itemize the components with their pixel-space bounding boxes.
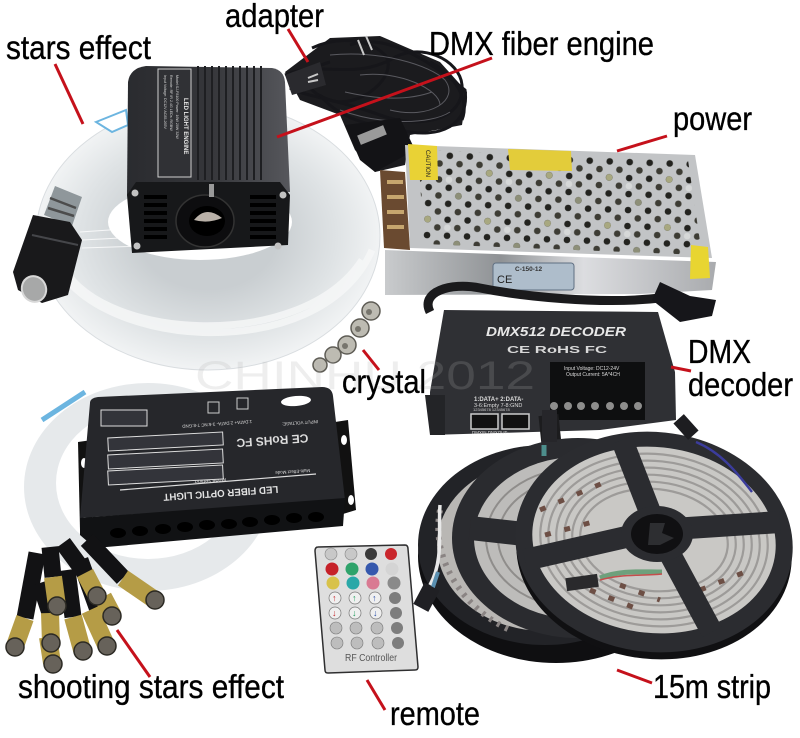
RF remote control	[315, 545, 418, 673]
remote arrow and DIY buttons: ↑	[352, 593, 356, 603]
label: DMX: DMX	[688, 333, 751, 370]
tail metal tips	[6, 587, 164, 673]
reel spokes and hub	[525, 440, 780, 632]
adapter cable bundle	[285, 36, 467, 172]
label: DMX fiber engine: DMX fiber engine	[429, 25, 654, 62]
model label	[493, 263, 574, 290]
label: crystal: crystal	[342, 363, 426, 400]
left strip connector	[413, 505, 440, 612]
decoder terminal	[550, 362, 645, 420]
control box panel text: INPUT VOLTAGE:	[282, 419, 318, 427]
lower metal plate	[385, 250, 716, 295]
label: shooting stars effect: shooting stars effect	[18, 668, 284, 705]
middle reel	[452, 438, 704, 638]
control box panel text: Mode setting:	[192, 476, 226, 484]
ring body	[36, 102, 380, 370]
ring label tag	[96, 110, 128, 132]
tail brass ends	[15, 573, 155, 663]
control box panel text: CE RoHS FC	[236, 431, 309, 450]
control box panel text: Multi-Effect Mode	[275, 468, 310, 475]
decoder cable and plug	[428, 286, 660, 312]
engine label plate	[158, 69, 191, 177]
remote color buttons	[325, 548, 400, 590]
DMX decoder: CE RoHS FC	[507, 344, 608, 356]
label: remote: remote	[390, 695, 480, 732]
decoder RJ45 ports: 3-6:Empty 7-8:GND	[474, 403, 522, 409]
decoder terminal: Input Voltage: DC12-24V	[564, 366, 620, 372]
fiber optic control box	[78, 387, 356, 548]
tail black sleeves	[25, 540, 123, 618]
power supply	[380, 144, 716, 295]
fiber crystal pieces	[313, 302, 380, 372]
engine top housing	[127, 66, 290, 195]
caution stickers	[408, 144, 438, 180]
engine label plate: Model:SJ-F8100 Power: 16W 20W 32W	[175, 75, 179, 139]
label: stars effect: stars effect	[6, 29, 151, 66]
control box top face	[80, 387, 345, 518]
terminal block	[380, 170, 410, 250]
stars effect fiber ring	[36, 102, 380, 370]
remote arrow and DIY buttons: ↓	[332, 608, 336, 618]
engine lens	[176, 195, 234, 247]
control box front face	[80, 498, 345, 548]
model label: C-150-12	[515, 266, 542, 273]
decoder terminal: Output Current: 5A*4CH	[566, 372, 620, 378]
decoder RJ45 ports: DMXIN DMXOUT	[472, 430, 507, 435]
model label: CE	[497, 274, 512, 286]
remote arrow and DIY buttons: ↓	[352, 608, 356, 618]
label: power: power	[673, 100, 752, 137]
label: 15m strip: 15m strip	[653, 668, 771, 705]
control box panel text	[120, 419, 318, 502]
watermark: CHINHU 2012	[195, 354, 535, 398]
strip wire and connector	[542, 410, 752, 591]
control box panel text: LED FIBER OPTIC LIGHT	[163, 483, 279, 502]
decoder RJ45 ports	[471, 397, 529, 435]
engine label plate: Input Voltage: DC12V AC85-265V	[163, 75, 167, 130]
engine screws	[132, 190, 286, 250]
engine label plate: LED LIGHT ENGINE	[182, 98, 188, 154]
decoder RJ45 ports: 1:DATA+ 2:DATA-	[474, 397, 523, 403]
front reel	[516, 432, 793, 660]
decoder RJ45 ports: 12345678 12345678	[473, 407, 510, 412]
decoder body	[430, 310, 676, 435]
DMX fiber engine	[127, 66, 290, 253]
control box panel text: 1:DATA+ 2:DATA- 3-6:NC 7-8:GND	[181, 419, 252, 429]
brass fiber tails	[6, 540, 164, 673]
control box DIP switches	[101, 410, 223, 485]
remote arrow and DIY buttons: ↑	[332, 593, 336, 603]
remote arrow and DIY buttons: ↓	[373, 608, 378, 618]
LED strip reels	[413, 410, 800, 673]
remote caption: RF Controller	[345, 653, 398, 664]
callout leader lines	[55, 29, 691, 710]
remote arrow and DIY buttons	[329, 592, 404, 649]
control box slot	[281, 395, 311, 407]
perforated cover	[405, 145, 712, 258]
ring hole	[108, 184, 292, 260]
back reel	[418, 445, 694, 663]
DMX decoder: DMX512 DECODER	[486, 325, 626, 339]
control box mounting ears	[78, 440, 92, 530]
DMX decoder	[425, 282, 716, 446]
power supply: CAUTION	[424, 150, 430, 177]
adapter plug body	[345, 118, 415, 172]
engine label plate: Remote: RF IR 2.4G LEDs: RGBW	[169, 75, 173, 131]
fiber connector	[13, 186, 180, 306]
engine front face	[127, 182, 290, 253]
remote arrow and DIY buttons: ↑	[372, 593, 376, 603]
shooting stars fiber ring	[24, 383, 272, 591]
adapter cable highlights	[330, 54, 450, 122]
